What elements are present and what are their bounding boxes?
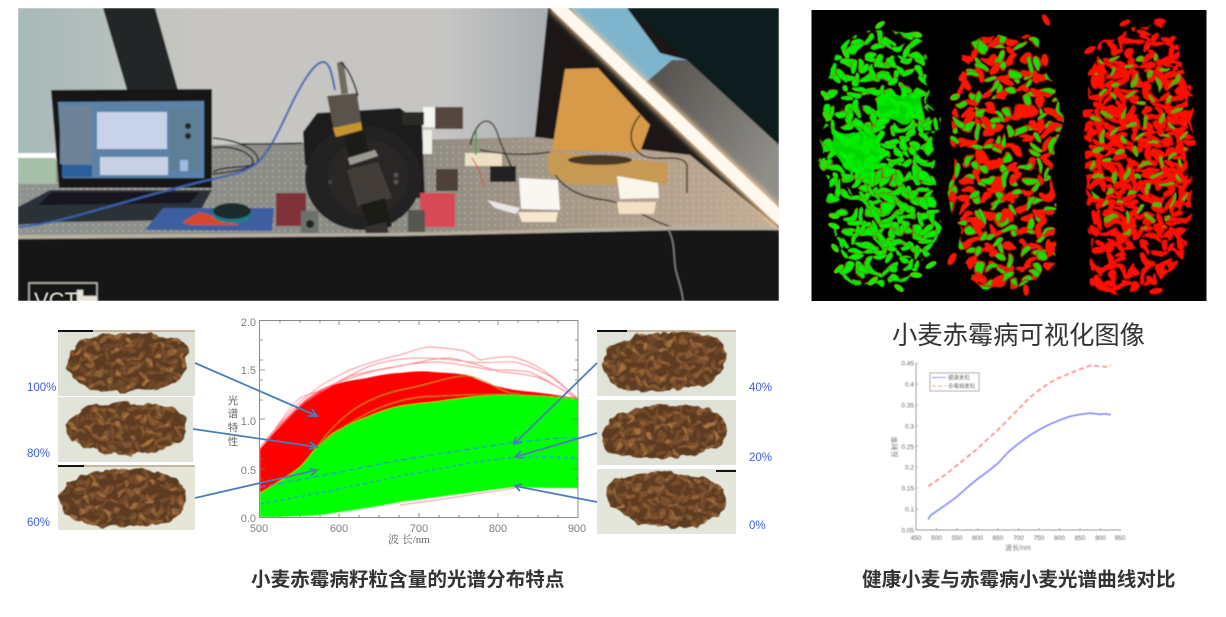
stepper motor assembly (423, 107, 435, 127)
chart: healthy vs infected spectra (890, 360, 1126, 552)
axis tick labels: 450 (911, 535, 922, 542)
red spectra (260, 371, 578, 495)
axis tick labels: 1.0 (241, 416, 256, 428)
logo frame (29, 283, 97, 301)
table surface (18, 137, 779, 238)
infected curve (928, 365, 1111, 486)
axis title: spectral characteristic: 光 (228, 394, 239, 407)
axis tick labels: 0.4 (905, 382, 914, 388)
axis tick labels: 750 (1034, 535, 1045, 542)
axis tick labels: 0.15 (901, 486, 914, 492)
camera (327, 93, 362, 136)
axis tick labels: 500 (931, 535, 942, 542)
axis tick labels: 0.3 (905, 424, 914, 430)
wall (18, 8, 548, 153)
heading: spectral distribution: 小麦赤霉病籽粒含量的光谱分布特点 (251, 568, 564, 591)
red blocks and knob (276, 193, 306, 226)
mean spectra (260, 438, 578, 487)
label: VCT logo: VCT (34, 288, 78, 313)
axis tick labels: 550 (952, 535, 963, 542)
cardboard box (552, 68, 650, 152)
seeds: healthy sample (821, 29, 942, 286)
image: seed sample 0% (597, 469, 736, 534)
axis tick labels (241, 317, 586, 535)
axis title: spectral characteristic: 谱 (228, 407, 239, 420)
table front (18, 228, 779, 301)
axis tick labels: 650 (993, 535, 1004, 542)
panel: visualization image of infected wheat (812, 10, 1206, 301)
axis tick labels: 0.2 (905, 464, 914, 472)
cables behind laptop (213, 138, 302, 174)
axis tick labels: 700 (410, 523, 428, 535)
axis tick labels: 0.1 (905, 506, 914, 514)
labels: infected seed percentage: 20% (749, 452, 772, 464)
image: seed sample 100% (58, 330, 195, 396)
axis tick labels: 900 (568, 523, 586, 535)
labels: infected seed percentage (27, 382, 772, 532)
image: seed sample 40% (597, 330, 736, 396)
axis tick labels: 2.0 (241, 317, 256, 329)
legend (930, 373, 979, 391)
labels: infected seed percentage: 40% (749, 382, 772, 394)
labels: infected seed percentage: 0% (749, 520, 766, 532)
axis tick labels: 800 (489, 523, 507, 535)
rotary stage (303, 108, 425, 200)
seeds: infected sample (1084, 22, 1193, 293)
back monitor (103, 8, 178, 90)
axis tick labels: 950 (1115, 535, 1126, 542)
axis tick labels: 600 (972, 535, 983, 542)
heading: visualization image: 小麦赤霉病可视化图像 (892, 322, 1145, 350)
axis title: spectral characteristic (228, 394, 239, 448)
chart: spectral distribution (228, 317, 586, 546)
axis tick labels: 900 (1095, 535, 1106, 542)
legend: 赤霉病麦粒 (948, 382, 976, 390)
axis tick labels: 1.5 (241, 365, 256, 377)
axis title: wavelength: 波长/nm (1005, 543, 1031, 552)
laptop base (18, 190, 212, 225)
healthy curve (928, 413, 1111, 520)
panel: experimental setup photo (18, 8, 779, 313)
dark backdrop (534, 8, 779, 228)
mouse pad and mouse (145, 208, 274, 231)
axis tick labels: 0.35 (901, 402, 914, 410)
image: seed sample 20% (597, 400, 736, 465)
axis tick labels: 600 (330, 523, 348, 535)
white light boxes (519, 178, 560, 210)
axis tick labels: 800 (1054, 535, 1065, 542)
axis title: spectral characteristic: 性 (228, 435, 238, 448)
axis title: reflectance: 反射率 (890, 436, 899, 458)
labels: infected seed percentage: 100% (27, 382, 56, 394)
axis tick labels: 0.25 (901, 444, 914, 451)
axis tick labels: 0.05 (901, 528, 914, 534)
legend: 健康麦粒 (948, 374, 971, 382)
cables on table (470, 115, 687, 228)
axis tick labels: 0.0 (241, 513, 256, 525)
cloth and light panel (642, 56, 779, 215)
image: seed sample 60% (58, 465, 195, 530)
green spectra (260, 395, 578, 517)
light strip (548, 8, 779, 230)
axis title: wavelength: 波 长/nm (388, 532, 430, 546)
laptop screen (51, 89, 212, 188)
axis tick labels: 0.5 (241, 465, 256, 477)
labels: infected seed percentage: 80% (27, 448, 50, 460)
blue USB cable (18, 62, 335, 227)
axis tick labels: 850 (1075, 535, 1086, 542)
labels: infected seed percentage: 60% (27, 517, 50, 529)
seeds: mixed sample (951, 35, 1060, 288)
axis tick labels: 700 (1013, 535, 1024, 542)
arrows: samples to spectra (193, 363, 597, 502)
image: seed sample 80% (58, 397, 193, 462)
axes frame (260, 320, 578, 518)
axis tick labels: 0.45 (901, 360, 914, 368)
axis tick labels: 500 (250, 523, 268, 535)
axis tick labels (901, 360, 1126, 542)
notebook on the left (18, 158, 56, 184)
heading: spectral curve comparison: 健康小麦与赤霉病小麦光谱曲线对比 (862, 568, 1176, 591)
axis title: spectral characteristic: 特 (228, 422, 239, 434)
